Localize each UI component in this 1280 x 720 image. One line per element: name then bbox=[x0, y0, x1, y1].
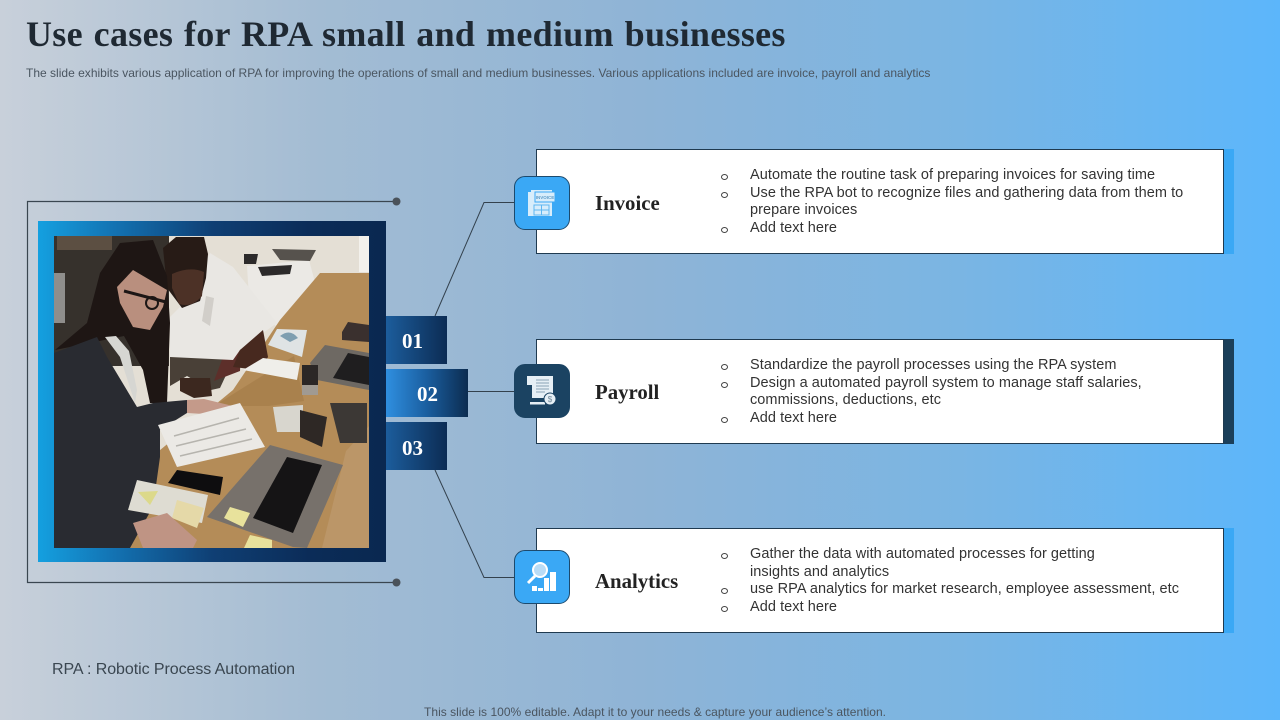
footer note: This slide is 100% editable. Adapt it to your needs & capture your audience’s attention. bbox=[424, 705, 886, 719]
phone bbox=[168, 470, 223, 495]
photo bracket frame bbox=[26, 198, 400, 586]
analytics heading: Analytics bbox=[595, 570, 678, 593]
laptop bbox=[207, 445, 343, 548]
table bbox=[63, 273, 369, 548]
payroll bullets: Standardize the payroll processes using the RPA system bbox=[750, 356, 1116, 372]
icon: invoice: INVOICE bbox=[536, 195, 554, 200]
analytics bullets: insights and analytics bbox=[750, 564, 889, 580]
man's lower body bbox=[170, 356, 234, 390]
icon: analytics bbox=[514, 550, 570, 604]
invoice card bbox=[536, 149, 1224, 254]
icon: payroll bbox=[514, 364, 570, 418]
number tab 03 bbox=[386, 422, 447, 470]
man's head bbox=[163, 237, 208, 308]
woman's hand bbox=[187, 399, 233, 420]
woman's face and glasses bbox=[117, 270, 167, 330]
invoice heading: Invoice bbox=[595, 192, 660, 215]
title: Use cases for RPA small and medium businesses bbox=[26, 14, 786, 54]
icon: invoice bbox=[514, 176, 570, 230]
number tab 01: 01 bbox=[402, 329, 423, 353]
man's white shirt bbox=[170, 253, 277, 360]
number tab 02 bbox=[386, 369, 468, 417]
icon: payroll: $ bbox=[548, 395, 553, 404]
woman's jacket bbox=[54, 337, 187, 548]
payroll bullets: Design a automated payroll system to manage staff salaries, bbox=[750, 374, 1142, 390]
analytics accent strip bbox=[1224, 528, 1234, 633]
photo frame bbox=[38, 221, 386, 562]
number tab 03: 03 bbox=[402, 436, 423, 460]
analytics bullets bbox=[721, 546, 1179, 614]
payroll bullets: commissions, deductions, etc bbox=[750, 392, 941, 408]
payroll bullets bbox=[721, 356, 1142, 426]
man's hand bbox=[233, 330, 268, 370]
invoice bullets: Automate the routine task of preparing invoices for saving time bbox=[750, 166, 1155, 182]
panel: payroll bbox=[514, 339, 1234, 444]
invoice bullets: Use the RPA bot to recognize files and gathering data from them to bbox=[750, 184, 1183, 200]
analytics bullets: Add text here bbox=[750, 598, 837, 614]
payroll accent strip bbox=[1224, 339, 1234, 444]
invoice bullets bbox=[721, 166, 1183, 236]
number tab 02: 02 bbox=[417, 382, 438, 406]
panel: analytics bbox=[514, 528, 1234, 633]
analytics bullets: use RPA analytics for market research, employee assessment, etc bbox=[750, 580, 1179, 596]
connector lines bbox=[434, 202, 514, 578]
notepad bbox=[128, 480, 208, 523]
desk papers and items bbox=[268, 329, 307, 357]
panel: invoice bbox=[514, 149, 1234, 254]
subtitle: The slide exhibits various application of RPA for improving the operations of small and medium businesses. Various applications included are invoice, payroll and analytics bbox=[26, 66, 930, 80]
woman's blouse bbox=[105, 336, 137, 403]
bottom hand bbox=[133, 513, 197, 548]
number tab 01 bbox=[386, 316, 447, 364]
analytics bullets: Gather the data with automated processes for getting bbox=[750, 546, 1095, 562]
invoice bullets: prepare invoices bbox=[750, 202, 857, 218]
photo: two colleagues at a desk bbox=[54, 236, 369, 548]
document bbox=[158, 403, 265, 467]
analytics card bbox=[536, 528, 1224, 633]
printer bbox=[247, 260, 316, 326]
payroll card bbox=[536, 339, 1224, 444]
payroll bullets: Add text here bbox=[750, 410, 837, 426]
invoice bullets: Add text here bbox=[750, 220, 837, 236]
invoice accent strip bbox=[1224, 149, 1234, 254]
payroll heading: Payroll bbox=[595, 381, 659, 404]
woman's hair bbox=[55, 240, 170, 403]
footnote: RPA definition: RPA : Robotic Process Automation bbox=[52, 661, 295, 678]
